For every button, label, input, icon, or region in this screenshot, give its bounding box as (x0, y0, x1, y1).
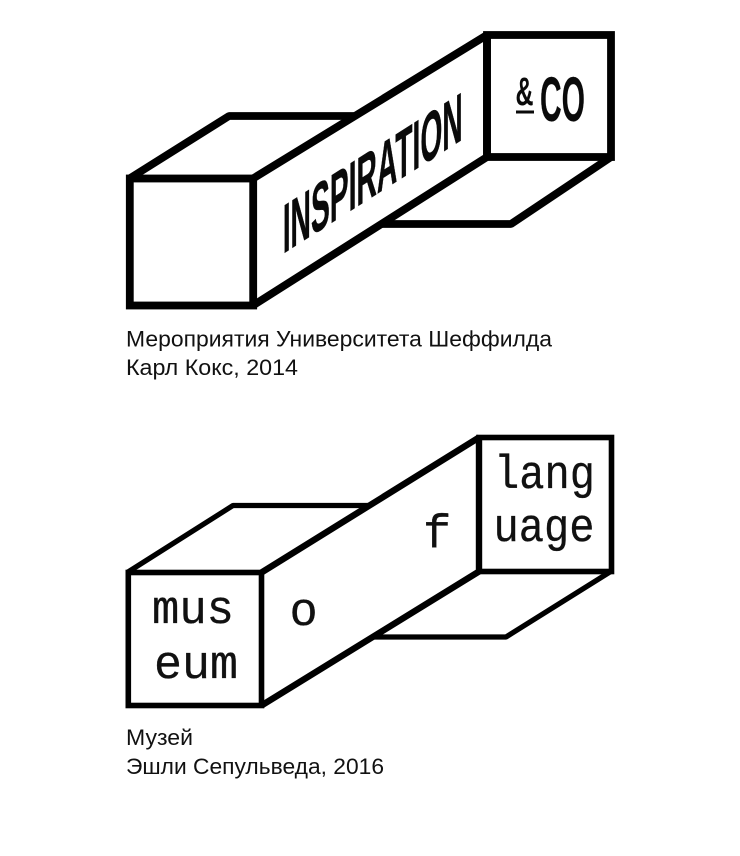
caption: University of Sheffield events: Мероприятия Университета Шеффилда (126, 326, 553, 352)
logo: Inspiration & Co (130, 35, 611, 306)
caption: University of Sheffield events: Карл Кокс, 2014 (126, 355, 298, 380)
front label: museum (152, 585, 238, 693)
end label: language (494, 450, 595, 556)
end label: language: uage (494, 503, 594, 556)
end label: & CO (516, 65, 585, 135)
caption: Museum (126, 725, 384, 779)
side label: of: o (290, 587, 318, 640)
end label: language: lang (494, 450, 595, 503)
box outline (130, 35, 611, 306)
caption: Museum: Эшли Сепульведа, 2016 (126, 754, 384, 779)
caption: University of Sheffield events (126, 326, 553, 380)
side label: of: f (423, 510, 451, 562)
front label: museum: eum (154, 640, 238, 693)
end label: & CO: & (516, 70, 534, 114)
side label: of (290, 510, 451, 640)
logo: Museum of Language (128, 438, 612, 706)
logo: Inspiration & Co: CO (540, 65, 585, 135)
box outline (128, 438, 612, 706)
front label: museum: mus (152, 585, 234, 638)
caption: Museum: Музей (126, 725, 193, 750)
